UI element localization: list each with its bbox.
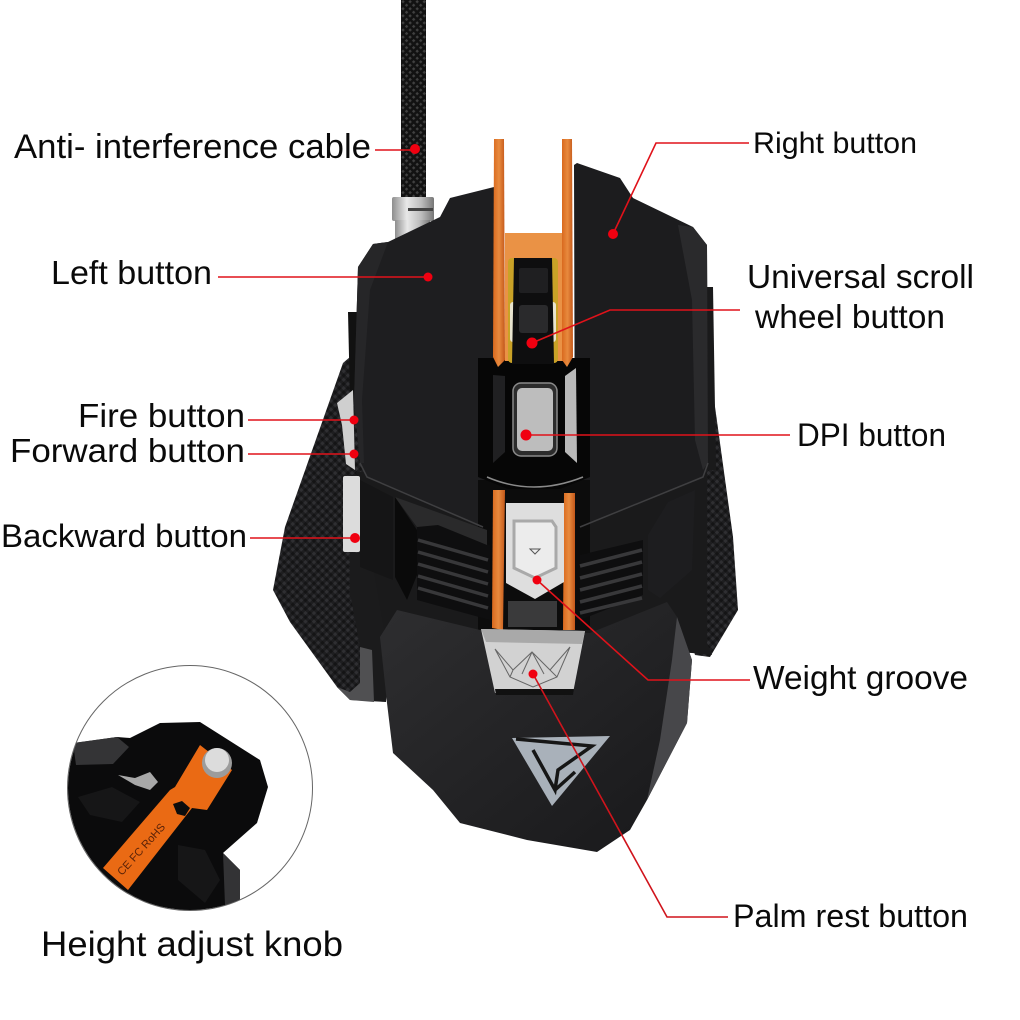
silver side inlay (565, 368, 577, 463)
left wing grey rim (337, 647, 374, 702)
label: right button: Right button (753, 127, 917, 160)
label: height adjust knob: Height adjust knob (41, 925, 343, 964)
upper left textured band (395, 497, 487, 545)
inset dark body (60, 722, 268, 915)
label: palm rest button: Palm rest button (733, 898, 968, 934)
crown plate (481, 629, 585, 695)
lower orange rail right (563, 493, 575, 630)
orange top rail right (562, 139, 573, 367)
inset knob (202, 748, 232, 778)
label: weight groove: Weight groove (753, 659, 968, 696)
label: DPI button: DPI button (797, 417, 946, 453)
inset grey shoulder (73, 737, 129, 765)
palm rest (380, 602, 692, 852)
left carbon grip wing (273, 350, 372, 700)
orange wheel bay (505, 233, 563, 361)
DPI bezel (478, 358, 590, 489)
label: weight groove (532, 576, 968, 696)
inset lower grey shoulder (223, 853, 240, 905)
label: right button (608, 127, 917, 239)
label: left button (51, 254, 432, 291)
label: forward button: Forward button (10, 432, 245, 469)
bezel highlight (487, 477, 583, 487)
label: universal scroll wheel button: Universal scroll (747, 258, 974, 295)
label: universal scroll wheel button: wheel button (754, 298, 945, 335)
inset window upper (78, 787, 140, 822)
backward silver button (343, 476, 360, 552)
left wing inner band (337, 552, 395, 702)
label: anti-interference cable: Anti- interference cable (14, 128, 371, 166)
weight groove plate (506, 503, 564, 599)
left main button (354, 187, 494, 532)
label: fire button (78, 397, 358, 434)
scroll wheel (508, 258, 558, 364)
weight block (508, 601, 557, 627)
inset silver shard (118, 772, 158, 790)
vent left (417, 525, 490, 620)
inset bar markings: CE FC RoHS (115, 821, 168, 878)
left side strip (348, 312, 358, 400)
label: forward button (10, 432, 358, 469)
vent right (580, 540, 643, 620)
label: palm rest button (528, 670, 968, 934)
DPI button (513, 383, 557, 456)
right side strip (700, 287, 716, 470)
mouse body illustration (273, 139, 738, 852)
orange top rail left (493, 139, 505, 367)
inset adjuster hole (173, 801, 190, 816)
right carbon grip wing (680, 385, 738, 657)
inset orange bar (103, 745, 232, 890)
right main button (574, 163, 708, 530)
center dark spine (478, 480, 590, 630)
label: backward button (1, 518, 360, 554)
lower orange rail left (492, 490, 505, 630)
left dark panel (360, 480, 393, 580)
palm rest facet (647, 617, 692, 800)
body edge highlights (360, 463, 708, 527)
right vent shroud (648, 490, 695, 598)
label: left button: Left button (51, 254, 212, 291)
left vent shroud (395, 497, 417, 600)
label: universal scroll wheel button (526, 258, 974, 348)
triangle logo (512, 736, 610, 806)
label: backward button: Backward button (1, 518, 247, 554)
inset window lower (178, 845, 220, 903)
lower chassis (356, 472, 712, 655)
label: DPI button (520, 417, 946, 453)
inset: height adjust knob (60, 666, 312, 915)
dark side inlay (493, 375, 505, 463)
label: fire button: Fire button (78, 397, 245, 434)
left side silver button (337, 390, 355, 470)
icon: braided cable with connector (392, 0, 434, 246)
